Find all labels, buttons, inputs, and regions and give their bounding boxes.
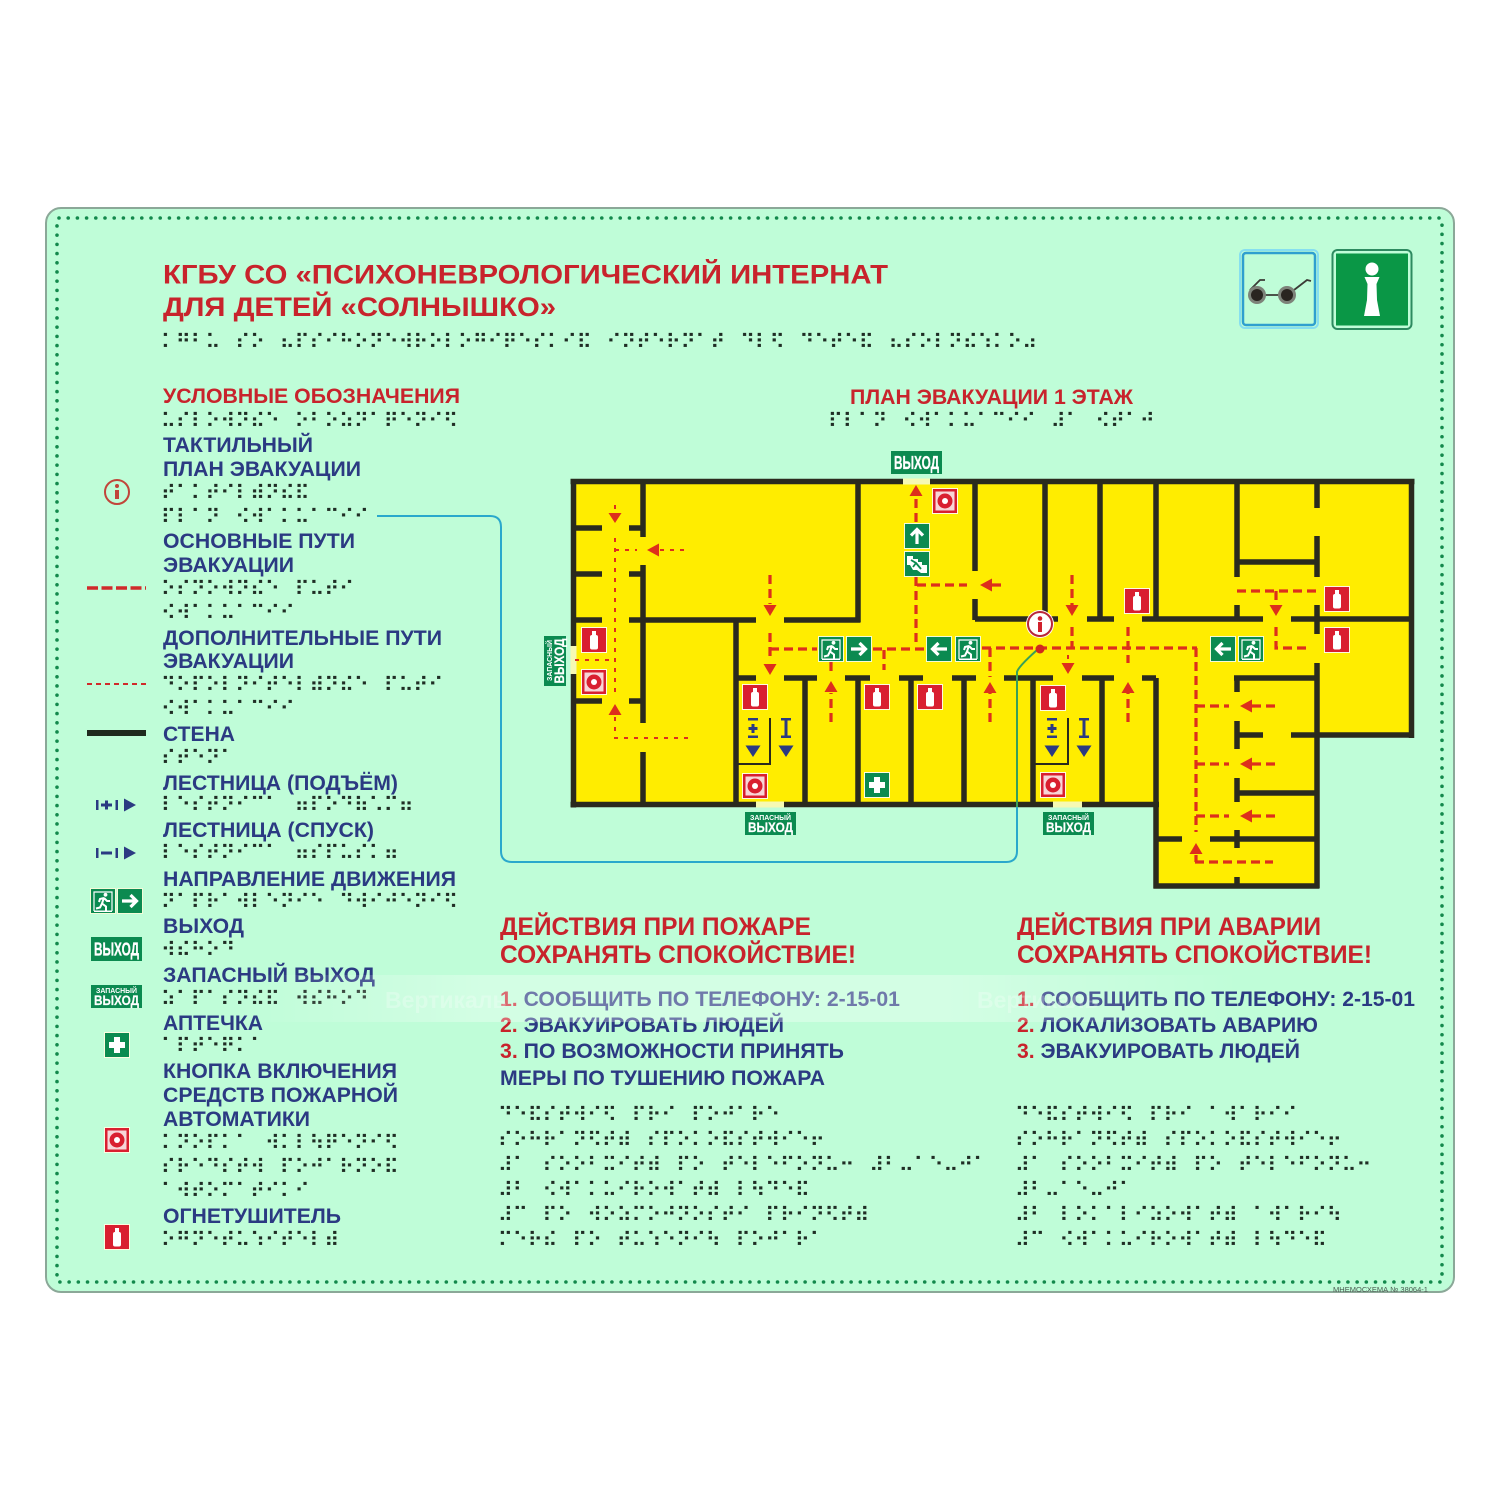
icon: you are here marker [1026, 610, 1054, 654]
plan sign: spare exit bottom 2: ВЫХОД [1046, 819, 1091, 835]
legend item: additional routes: ⠪⠺⠁⠅⠥⠁⠉⠊⠊ [161, 696, 295, 720]
legend item: exit: ⠺⠮⠓⠕⠙ [161, 938, 235, 962]
title braille: ⠅⠛⠃⠥⠀⠎⠕⠀⠦⠏⠎⠊⠓⠕⠝⠑⠺⠗⠕⠇⠕⠛⠊⠟⠑⠎⠅⠊⠯⠀⠊⠝⠞⠑⠗⠝⠁⠞⠀⠙⠇⠫⠀⠙⠑⠞⠑⠯⠀⠦⠎⠕⠇⠝⠮⠱⠅⠕⠴ [161, 330, 1037, 354]
text block: actions in case of fire: 3. ПО ВОЗМОЖНОСТИ ПРИНЯТЬ [500, 1040, 844, 1063]
legend item: first aid: АПТЕЧКА [163, 1012, 263, 1035]
text block: actions in case of accident: 2. ЛОКАЛИЗОВАТЬ АВАРИЮ [1017, 1014, 1318, 1037]
plan sign: spare exit left: ВЫХОД [551, 638, 567, 684]
text block: actions in case of accident: 1. СООБЩИТЬ ПО ТЕЛЕФОНУ: 2-15-01 [1017, 988, 1415, 1011]
legend item: extinguisher: ⠕⠛⠝⠑⠞⠥⠱⠊⠞⠑⠇⠾ [161, 1228, 339, 1252]
plan icon: first aid [864, 772, 890, 798]
legend item: first aid [104, 1012, 265, 1058]
legend item: spare exit [91, 963, 375, 1010]
legend item: tactile plan [105, 433, 369, 528]
legend item: spare exit: ЗАПАСНЫЙ ВЫХОД [163, 963, 375, 987]
plan sign: spare exit left: ЗАПАСНЫЙ [545, 640, 554, 681]
stair partitions [737, 718, 1068, 764]
legend item: stairs up [96, 772, 413, 816]
legend item: main routes: ЭВАКУАЦИИ [163, 554, 294, 577]
legend item: tactile plan: ПЛАН ЭВАКУАЦИИ [163, 458, 361, 481]
plan sign: spare exit left [544, 636, 567, 686]
additional evacuation routes [575, 505, 690, 738]
braille block: actions in case of fire: ⠍⠑⠗⠮⠀⠏⠕⠀⠞⠥⠱⠑⠝⠊⠳⠀⠏⠕⠚⠁⠗⠁ [498, 1228, 825, 1252]
plan floor [573, 481, 1409, 886]
text block: actions in case of fire: 1. СООБЩИТЬ ПО ТЕЛЕФОНУ: 2-15-01 [500, 988, 900, 1011]
legend item: stairs down: ЛЕСТНИЦА (СПУСК) [163, 819, 374, 842]
legend item: additional routes: ЭВАКУАЦИИ [163, 650, 294, 673]
braille block: actions in case of fire: ⠼⠁⠀⠎⠕⠕⠃⠭⠊⠞⠾⠀⠏⠕⠀⠞⠑⠇⠑⠋⠕⠝⠥⠒⠀⠼⠃⠤⠁⠑⠤⠚⠁ [498, 1152, 988, 1176]
text block: actions in case of accident: 3. ЭВАКУИРОВАТЬ ЛЮДЕЙ [1017, 1039, 1300, 1063]
legend item: fire alarm button: ⠅⠝⠕⠏⠅⠁⠀⠺⠅⠇⠳⠟⠑⠝⠊⠫ [161, 1130, 399, 1154]
icon: information sign [1332, 250, 1412, 329]
legend item: exit: ВЫХОД [163, 915, 244, 938]
legend item: main routes: ОСНОВНЫЕ ПУТИ [163, 530, 355, 553]
watermark band: Вертикаль [977, 987, 1099, 1013]
legend item: tactile plan: ТАКТИЛЬНЫЙ [163, 433, 313, 457]
legend item: fire alarm button: ⠁⠺⠞⠕⠍⠁⠞⠊⠅⠊ [161, 1178, 309, 1202]
braille block: actions in case of fire: ⠙⠑⠯⠎⠞⠺⠊⠫⠀⠏⠗⠊⠀⠏⠕⠚⠁⠗⠑ [498, 1102, 780, 1126]
braille block: actions in case of fire: ⠎⠕⠓⠗⠁⠝⠫⠞⠾⠀⠎⠏⠕⠅⠕⠯⠎⠞⠺⠊⠑⠖ [498, 1128, 825, 1152]
legend item: stairs down: ⠇⠑⠎⠞⠝⠊⠉⠁⠀⠶⠎⠏⠥⠎⠅⠶ [161, 840, 399, 864]
legend item: fire alarm button: ⠎⠗⠑⠙⠎⠞⠺⠀⠏⠕⠚⠁⠗⠝⠕⠯ [161, 1154, 399, 1178]
legend heading: УСЛОВНЫЕ ОБОЗНАЧЕНИЯ [163, 385, 460, 408]
connector line from legend to plan marker [377, 516, 1037, 862]
text block: actions in case of fire [500, 911, 900, 1090]
legend item: stairs up: ⠇⠑⠎⠞⠝⠊⠉⠁⠀⠶⠏⠕⠙⠷⠡⠍⠶ [161, 792, 413, 816]
legend item: main routes: ⠪⠺⠁⠅⠥⠁⠉⠊⠊ [161, 600, 295, 624]
text block: actions in case of fire: СОХРАНЯТЬ СПОКОЙСТВИЕ! [500, 939, 856, 969]
title: КГБУ СО «ПСИХОНЕВРОЛОГИЧЕСКИЙ ИНТЕРНАТ [163, 258, 889, 290]
legend item: extinguisher: ОГНЕТУШИТЕЛЬ [163, 1205, 341, 1228]
plan icons: direction signs [818, 523, 1264, 662]
legend item: main routes [87, 530, 355, 624]
watermark band: Вертикаль [385, 987, 507, 1013]
plan icons: stairs [746, 718, 1092, 757]
plan sign: exit top: ВЫХОД [894, 453, 939, 473]
legend item: tactile plan: ⠏⠇⠁⠝⠀⠪⠺⠁⠅⠥⠁⠉⠊⠊ [161, 504, 369, 528]
plan heading: ПЛАН ЭВАКУАЦИИ 1 ЭТАЖ [850, 386, 1134, 409]
floor plan [544, 451, 1414, 888]
legend item: wall: ⠎⠞⠑⠝⠁ [161, 746, 235, 770]
braille block: actions in case of accident: ⠎⠕⠓⠗⠁⠝⠫⠞⠾⠀⠎⠏⠕⠅⠕⠯⠎⠞⠺⠊⠑⠖ [1015, 1128, 1342, 1152]
legend item: exit [91, 915, 244, 962]
legend item: additional routes [87, 627, 443, 720]
plan icons: extinguishers [581, 586, 1350, 711]
plan sign: exit top [891, 451, 942, 474]
legend item: direction: ⠝⠁⠏⠗⠁⠺⠇⠑⠝⠊⠑⠀⠙⠺⠊⠚⠑⠝⠊⠫ [161, 890, 458, 914]
plan walls [570, 479, 1414, 888]
legend item: fire alarm button: АВТОМАТИКИ [163, 1108, 310, 1131]
legend item: extinguisher [104, 1205, 341, 1252]
text block: actions in case of accident: СОХРАНЯТЬ СПОКОЙСТВИЕ! [1017, 939, 1372, 969]
legend item: wall [87, 723, 235, 770]
footer code: МНЕМОСХЕМА № 38064-1 [1333, 1285, 1428, 1294]
legend heading: ⠥⠎⠇⠕⠺⠝⠮⠑⠀⠕⠃⠕⠵⠝⠁⠟⠑⠝⠊⠫ [161, 408, 458, 432]
title [163, 258, 889, 322]
legend item: additional routes: ДОПОЛНИТЕЛЬНЫЕ ПУТИ [163, 627, 442, 650]
legend item: fire alarm button [104, 1060, 399, 1202]
watermark band [240, 975, 1240, 1022]
text block: actions in case of fire: 2. ЭВАКУИРОВАТЬ ЛЮДЕЙ [500, 1013, 784, 1037]
legend item: fire alarm button: СРЕДСТВ ПОЖАРНОЙ [163, 1083, 398, 1107]
plan icons: alarm buttons [581, 488, 1066, 799]
braille block: actions in case of fire [498, 1102, 988, 1252]
braille block: actions in case of accident [1015, 1102, 1371, 1252]
main evacuation routes [764, 485, 1316, 862]
braille block: actions in case of fire: ⠼⠃⠀⠪⠺⠁⠅⠥⠊⠗⠕⠺⠁⠞⠾⠀⠇⠳⠙⠑⠯ [498, 1178, 810, 1202]
braille block: actions in case of accident: ⠼⠃⠤⠁⠑⠤⠚⠁ [1015, 1178, 1134, 1202]
plan heading: ⠏⠇⠁⠝⠀⠪⠺⠁⠅⠥⠁⠉⠊⠊⠀⠼⠁⠀⠪⠞⠁⠚ [828, 408, 1155, 432]
braille block: actions in case of accident: ⠼⠃⠀⠇⠕⠅⠁⠇⠊⠵⠕⠺⠁⠞⠾⠀⠁⠺⠁⠗⠊⠳ [1015, 1202, 1342, 1226]
legend item: stairs up: ЛЕСТНИЦА (ПОДЪЁМ) [163, 772, 398, 795]
legend item: spare exit: ⠵⠁⠏⠁⠎⠝⠮⠯⠀⠺⠮⠓⠕⠙ [161, 986, 369, 1010]
braille block: actions in case of fire: ⠼⠉⠀⠏⠕⠀⠺⠕⠵⠍⠕⠚⠝⠕⠎⠞⠊⠀⠏⠗⠊⠝⠫⠞⠾ [498, 1202, 869, 1226]
icon: glasses [1240, 250, 1318, 328]
text block: actions in case of fire: ДЕЙСТВИЯ ПРИ ПОЖАРЕ [500, 911, 811, 941]
legend item: additional routes: ⠙⠕⠏⠕⠇⠝⠊⠞⠑⠇⠾⠝⠮⠑⠀⠏⠥⠞⠊ [161, 672, 443, 696]
plan exit gaps [570, 478, 1082, 808]
plan sign: spare exit bottom 1 [745, 812, 796, 835]
legend item: spare exit: ЗАПАСНЫЙ [96, 986, 137, 995]
legend heading [161, 385, 460, 432]
legend item: spare exit: ВЫХОД [94, 992, 139, 1008]
plan sign: spare exit bottom 1: ВЫХОД [748, 819, 793, 835]
legend item: direction: НАПРАВЛЕНИЕ ДВИЖЕНИЯ [163, 868, 456, 891]
text block: actions in case of fire: МЕРЫ ПО ТУШЕНИЮ ПОЖАРА [500, 1067, 825, 1090]
plan sign: spare exit bottom 1: ЗАПАСНЫЙ [750, 813, 791, 822]
legend item: direction [90, 868, 458, 914]
legend item: first aid: ⠁⠏⠞⠑⠟⠅⠁ [161, 1034, 265, 1058]
text block: actions in case of accident [1017, 911, 1415, 1063]
title: ДЛЯ ДЕТЕЙ «СОЛНЫШКО» [163, 291, 556, 322]
legend item: fire alarm button: КНОПКА ВКЛЮЧЕНИЯ [163, 1060, 397, 1083]
legend item: main routes: ⠕⠎⠝⠕⠺⠝⠮⠑⠀⠏⠥⠞⠊ [161, 576, 354, 600]
plan sign: spare exit bottom 2: ЗАПАСНЫЙ [1048, 813, 1089, 822]
braille block: actions in case of accident: ⠼⠁⠀⠎⠕⠕⠃⠭⠊⠞⠾⠀⠏⠕⠀⠞⠑⠇⠑⠋⠕⠝⠥⠒ [1015, 1152, 1371, 1176]
plan sign: spare exit bottom 2 [1043, 812, 1094, 835]
braille block: actions in case of accident: ⠼⠉⠀⠪⠺⠁⠅⠥⠊⠗⠕⠺⠁⠞⠾⠀⠇⠳⠙⠑⠯ [1015, 1228, 1327, 1252]
plan heading [828, 386, 1155, 432]
text block: actions in case of accident: ДЕЙСТВИЯ ПРИ АВАРИИ [1017, 911, 1321, 941]
braille block: actions in case of accident: ⠙⠑⠯⠎⠞⠺⠊⠫⠀⠏⠗⠊⠀⠁⠺⠁⠗⠊⠊ [1015, 1102, 1297, 1126]
panel: sign background [46, 208, 1454, 1292]
legend item: exit: ВЫХОД [94, 940, 139, 960]
legend item: stairs down [96, 819, 399, 864]
legend item: tactile plan: ⠞⠁⠅⠞⠊⠇⠾⠝⠮⠯ [161, 480, 309, 504]
legend item: wall: СТЕНА [163, 723, 235, 746]
